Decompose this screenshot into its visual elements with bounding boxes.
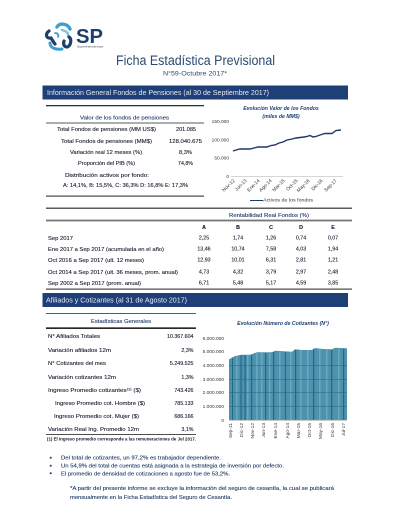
- row: 36 months: Oct 2014 a Sep 2017 (ult. 36 meses, prom. anual): [48, 270, 178, 276]
- y axis labels: [212, 119, 229, 180]
- column headings: [202, 225, 335, 231]
- chart title: Evolución Valor de los Fondos: [243, 106, 319, 112]
- row: real variation: 8,3%: [179, 150, 192, 156]
- text: asset distribution: [63, 173, 188, 189]
- text: asset distribution: Distribución activos por fondo:: [65, 173, 149, 179]
- logo caption: Superintendencia: [77, 44, 103, 48]
- bar chart: contributors evolution: [203, 321, 347, 439]
- row: real income variation: [48, 427, 194, 433]
- row: total CLP: 128.040.675: [169, 139, 202, 145]
- row: since 2002: 3,85: [328, 280, 338, 286]
- subtitle: N°59-Octubre 2017*: [163, 70, 227, 78]
- x axis labels: Nov-12: [221, 178, 237, 193]
- row: Sep 2017: 1,74: [233, 236, 243, 242]
- row: contributors variation: Variación cotizantes 12m: [48, 375, 117, 381]
- y axis labels: 4.000.000: [203, 363, 224, 369]
- row: real income variation: Variación Real Ing. Promedio 12m: [48, 427, 140, 433]
- x axis labels: Ago-14: [258, 178, 274, 193]
- y axis labels: 1.000.000: [203, 404, 224, 410]
- heading bar: pension funds: Información General Fondos de Pensiones (al 30 de Septiembre 2017): [47, 88, 269, 97]
- row: 12 months: [48, 258, 338, 264]
- table heading: Rentabilidad Real Fondos (%): [229, 213, 309, 219]
- x axis labels: Mar-15: [271, 178, 287, 193]
- panel: pension fund values: [46, 105, 204, 197]
- row: total affiliates: 10.367.604: [167, 334, 194, 340]
- heading bar: affiliates: [42, 293, 348, 307]
- column headings: E: [331, 225, 335, 231]
- row: real variation: Variación real 12 meses (%): [70, 150, 142, 156]
- x axis labels: Dic-16: [330, 423, 336, 437]
- logo: [47, 24, 103, 49]
- x axis labels: [221, 178, 339, 194]
- row: 36 months: 3,79: [266, 270, 276, 276]
- row: 36 months: 2,97: [296, 270, 306, 276]
- text block: key bullets: Del total de cotizantes, un 97,2% es trabajador dependiente.: [61, 456, 221, 462]
- x axis labels: May-16: [318, 423, 324, 439]
- row: 12 months: 1,21: [328, 258, 338, 264]
- y axis labels: 0: [226, 174, 229, 180]
- row: affiliates variation: 2,3%: [181, 348, 194, 354]
- row: affiliates variation: [48, 348, 194, 354]
- chart title: Evolución Número de Cotizantes (N°): [237, 321, 329, 327]
- row: contributors variation: 1,3%: [181, 375, 194, 381]
- row: since 2002: [48, 280, 338, 287]
- title: Ficha Estadística Previsional: [116, 53, 275, 68]
- icon: star swirl: [47, 24, 71, 49]
- row: year to date: 1,94: [328, 246, 338, 252]
- footnote: (1) El ingreso promedio corresponde a las remuneraciones de Jul 2017.: [47, 436, 196, 442]
- panel: real returns table: [46, 208, 352, 290]
- row: average income: Ingreso Promedio cotizantes⁽¹⁾ ($): [48, 388, 141, 394]
- row: 36 months: [48, 270, 338, 276]
- y axis labels: 150.000: [212, 119, 229, 125]
- row: GDP share: Proporción del PIB (%): [78, 161, 135, 167]
- text: asset distribution: A: 14,1%, B: 15,5%, C: 36,3% D: 16,8% E: 17,3%: [63, 183, 188, 189]
- y axis labels: 100.000: [212, 138, 229, 144]
- row: 36 months: 2,48: [328, 270, 338, 276]
- column headings: D: [299, 225, 303, 231]
- x axis labels: Mar-15: [296, 423, 302, 438]
- y axis labels: 5.000.000: [203, 349, 224, 355]
- x axis labels: Sep-17: [323, 178, 339, 193]
- row: 36 months: 4,73: [199, 270, 209, 276]
- x axis labels: Nov-12: [250, 423, 256, 438]
- x axis labels: Ene-14: [246, 178, 262, 193]
- x axis labels: Jun-13: [261, 423, 267, 438]
- x axis labels: Jul-17: [341, 423, 347, 436]
- row: year to date: [48, 246, 338, 253]
- row: income women: [54, 414, 194, 420]
- column headings: B: [236, 225, 240, 231]
- row: Sep 2017: [48, 236, 338, 242]
- text block: key bullets: Un 54,9% del total de cuentas está asignada a la estrategia de inversión por defecto.: [61, 464, 284, 470]
- x axis labels: Dic-12: [239, 423, 245, 437]
- row: Sep 2017: 1,26: [266, 236, 276, 242]
- column headings: C: [269, 225, 273, 231]
- row: year to date: 4,03: [296, 246, 306, 252]
- row: total affiliates: [48, 334, 194, 340]
- text block: key bullets: [50, 456, 284, 477]
- x axis labels: Oct-15: [285, 178, 300, 193]
- row: 12 months: Oct 2016 a Sep 2017 (ult. 12 meses): [48, 258, 144, 264]
- row: real variation: [70, 150, 192, 156]
- text block: footnote on unemployment insurance: *A partir del presente informe se excluye la información del seguro de cesantía, la cual se publicará: [70, 486, 334, 492]
- row: average income: 743.426: [174, 388, 194, 394]
- legend: Activos de los fondos: [263, 198, 314, 204]
- row: Sep 2017: 2,25: [199, 236, 209, 242]
- data line: [233, 130, 341, 151]
- x axis labels: Ago-14: [285, 423, 291, 438]
- y axis labels: 3.000.000: [203, 377, 224, 383]
- row: total USD: Total Fondos de pensiones (MM US$): [57, 127, 156, 133]
- y axis labels: 50.000: [214, 156, 229, 162]
- row: total CLP: Total Fondos de pensiones (MM$): [61, 139, 152, 145]
- line chart: fund value evolution: [212, 106, 343, 204]
- row: GDP share: 74,8%: [178, 161, 193, 167]
- row: 12 months: 2,81: [296, 258, 306, 264]
- x axis labels: Ene-14: [273, 423, 279, 438]
- row: 12 months: 6,31: [266, 258, 276, 264]
- x axis labels: Dic-16: [310, 178, 325, 192]
- row: income men: Ingreso Promedio cot. Hombre ($): [55, 401, 145, 407]
- row: contributors: 5.249.525: [170, 361, 194, 367]
- row: income men: 785.133: [174, 401, 194, 407]
- row: year to date: 7,58: [266, 246, 276, 252]
- row: income men: [55, 401, 194, 407]
- row: contributors variation: [48, 375, 194, 381]
- column headings: A: [202, 225, 206, 231]
- text block: footnote on unemployment insurance: mensualmente en la Ficha Estadística del Seguro de Cesantía.: [70, 495, 232, 501]
- row: Sep 2017: 0,07: [328, 236, 338, 242]
- heading bar: affiliates: Afiliados y Cotizantes (al 31 de Agosto 2017): [46, 295, 187, 304]
- x axis labels: Jun-13: [234, 178, 249, 193]
- row: total CLP: [61, 139, 202, 145]
- row: year to date: Ene 2017 a Sep 2017 (acumulada en el año): [48, 247, 164, 253]
- text block: footnote on unemployment insurance: [70, 486, 334, 501]
- x axis labels: [228, 423, 347, 439]
- row: since 2002: 5,48: [233, 280, 243, 286]
- bars: [229, 348, 347, 420]
- y axis labels: 2.000.000: [203, 390, 224, 396]
- row: income women: Ingreso Promedio cot. Mujer ($): [54, 414, 139, 420]
- y axis labels: 6.000.000: [203, 336, 224, 342]
- row: year to date: 13,46: [197, 246, 211, 252]
- panel: general statistics: [46, 313, 196, 442]
- row: real income variation: 3,1%: [181, 427, 194, 433]
- row: affiliates variation: Variación afiliados 12m: [48, 348, 112, 354]
- x axis labels: Sep-11: [228, 423, 234, 438]
- table heading: Estadísticas Generales: [91, 319, 151, 325]
- row: contributors: N° Cotizantes del mes: [48, 361, 106, 367]
- row: contributors: [48, 361, 194, 367]
- y axis labels: [203, 336, 224, 424]
- row: since 2002: Sep 2002 a Sep 2017 (prom. anual): [48, 281, 141, 287]
- row: 12 months: 10,01: [231, 258, 245, 264]
- row: total affiliates: N° Afiliados Totales: [48, 334, 100, 340]
- row: income women: 686.166: [174, 414, 194, 420]
- table heading: Valor de los fondos de pensiones: [80, 115, 169, 121]
- y axis labels: 0: [221, 418, 224, 424]
- line chart: fund value evolution: (miles de MM$): [262, 114, 300, 120]
- row: total USD: [57, 127, 196, 133]
- row: since 2002: 5,17: [266, 280, 276, 286]
- row: year to date: 10,74: [231, 246, 245, 252]
- row: average income: [48, 388, 194, 394]
- row: since 2002: 4,59: [296, 280, 306, 286]
- row: 36 months: 4,32: [233, 270, 243, 276]
- heading bar: pension funds: [42, 86, 348, 100]
- logo letters: SP: [76, 26, 103, 48]
- row: since 2002: 6,71: [199, 280, 209, 286]
- row: 12 months: 12,93: [197, 258, 211, 264]
- row: Sep 2017: Sep 2017: [48, 236, 73, 242]
- row: GDP share: [78, 161, 193, 167]
- x axis labels: May-16: [296, 178, 312, 194]
- text block: key bullets: El promedio de densidad de cotizaciones a agosto fue de 53,2%.: [61, 471, 230, 477]
- row: total USD: 201.085: [176, 127, 196, 133]
- row: Sep 2017: 0,74: [296, 236, 306, 242]
- x axis labels: Oct-15: [307, 423, 313, 437]
